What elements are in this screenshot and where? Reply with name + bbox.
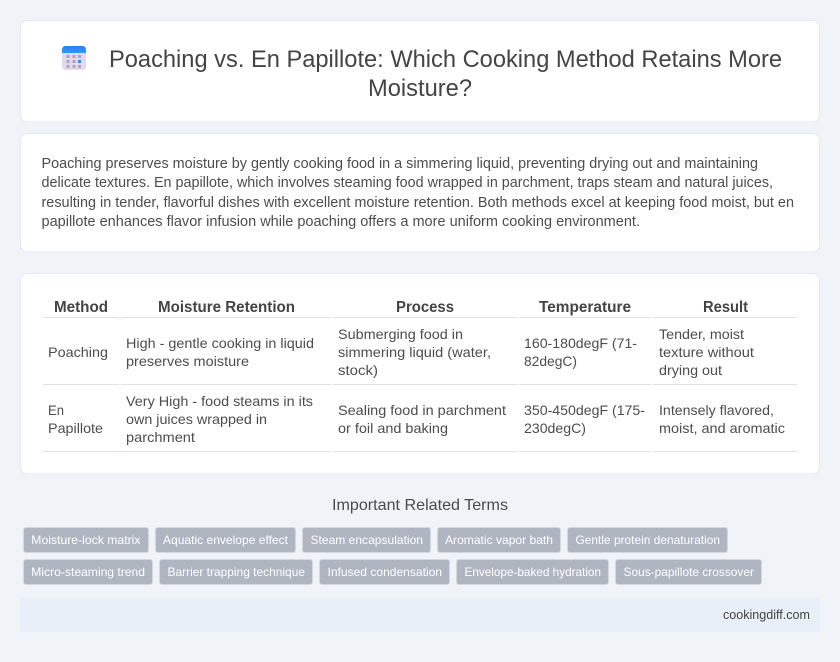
chip: micro-steaming trend: Micro-steaming trend	[31, 565, 145, 579]
table row: poaching: Submerging food in	[338, 326, 463, 342]
table row: en papillote: own juices wrapped in	[126, 411, 267, 427]
title	[109, 46, 782, 102]
table header row: Moisture Retention	[158, 299, 295, 316]
table row: en papillote: Sealing food in parchment	[338, 402, 506, 418]
chip: envelope-baked hydration: Envelope-baked hydration	[464, 565, 601, 579]
chip: moisture-lock matrix	[24, 528, 148, 552]
chip: steam encapsulation	[302, 528, 430, 552]
table row: en papillote: moist, and aromatic	[659, 420, 785, 436]
table row: poaching: texture without	[659, 344, 754, 360]
title: Poaching vs. En Papillote: Which Cooking Method Retains More	[109, 46, 782, 73]
chip: micro-steaming trend	[24, 560, 152, 584]
chip: sous-papillote crossover: Sous-papillote crossover	[624, 565, 754, 579]
table row: poaching: preserves moisture	[126, 353, 249, 369]
table row: en papillote: Intensely flavored,	[659, 402, 774, 418]
title: Moisture?	[368, 75, 472, 102]
table row: en papillote: Papillote	[48, 420, 103, 436]
table header row: Method	[54, 299, 108, 316]
text block: summary: resulting in tender, flavorful dishes with excellent moisture retention. Both methods excel at keeping food moist, but en	[42, 195, 794, 211]
table row: poaching: High - gentle cooking in liquid	[126, 335, 314, 351]
table row: en papillote: En	[48, 402, 64, 418]
chip: infused condensation: Infused condensation	[328, 565, 442, 579]
panel: related term chips	[24, 528, 762, 584]
table row: en papillote	[48, 393, 785, 445]
chip: aquatic envelope effect: Aquatic envelope effect	[163, 533, 289, 547]
table row: poaching: stock)	[338, 362, 378, 378]
icon: calendar	[62, 46, 86, 70]
table row: poaching	[48, 326, 754, 378]
table row: poaching: Poaching	[48, 344, 108, 360]
table row: poaching: Tender, moist	[659, 326, 744, 342]
chip: aquatic envelope effect	[156, 528, 296, 552]
heading: related terms: Important Related Terms	[332, 497, 508, 514]
table row: en papillote: parchment	[126, 429, 195, 445]
panel: summary paragraph	[20, 134, 820, 252]
chip: barrier trapping technique: Barrier trapping technique	[168, 565, 305, 579]
table header row: Result	[703, 299, 749, 316]
text block: summary: papillote enhances flavor infusion while poaching offers a more uniform cooking environment.	[42, 214, 640, 230]
chip: gentle protein denaturation	[568, 528, 728, 552]
chip: envelope-baked hydration	[456, 560, 608, 584]
chip: aromatic vapor bath	[438, 528, 560, 552]
table header row: Process	[396, 299, 454, 316]
table row: en papillote: 350-450degF (175-	[524, 402, 645, 418]
text block: summary: delicate textures. En papillote, which involves steaming food wrapped in parchment, traps steam and natural juices,	[42, 175, 773, 191]
chip: aromatic vapor bath: Aromatic vapor bath	[445, 533, 553, 547]
table row: poaching: 82degC)	[524, 353, 577, 369]
chip: sous-papillote crossover	[616, 560, 762, 584]
chip: moisture-lock matrix: Moisture-lock matrix	[31, 533, 140, 547]
table row: en papillote: 230degC)	[524, 420, 586, 436]
chip: gentle protein denaturation: Gentle protein denaturation	[576, 533, 720, 547]
table row: en papillote: Very High - food steams in its	[126, 393, 313, 409]
table header row: Temperature	[539, 299, 631, 316]
table row: poaching: drying out	[659, 362, 722, 378]
table header row	[54, 299, 749, 316]
table row: en papillote: or foil and baking	[338, 420, 448, 436]
chip: steam encapsulation: Steam encapsulation	[310, 533, 423, 547]
footer: cookingdiff.com	[723, 608, 810, 622]
table row: poaching: simmering liquid (water,	[338, 344, 491, 360]
panel: comparison table	[20, 274, 820, 474]
panel: title header	[20, 20, 820, 122]
chip: barrier trapping technique	[160, 560, 312, 584]
table row: poaching: 160-180degF (71-	[524, 335, 637, 351]
text block: summary	[42, 156, 794, 230]
text block: summary: Poaching preserves moisture by gently cooking food in a simmering liquid, preventing drying out and maintaining	[42, 156, 758, 172]
chip: infused condensation	[320, 560, 450, 584]
footer	[20, 598, 820, 632]
